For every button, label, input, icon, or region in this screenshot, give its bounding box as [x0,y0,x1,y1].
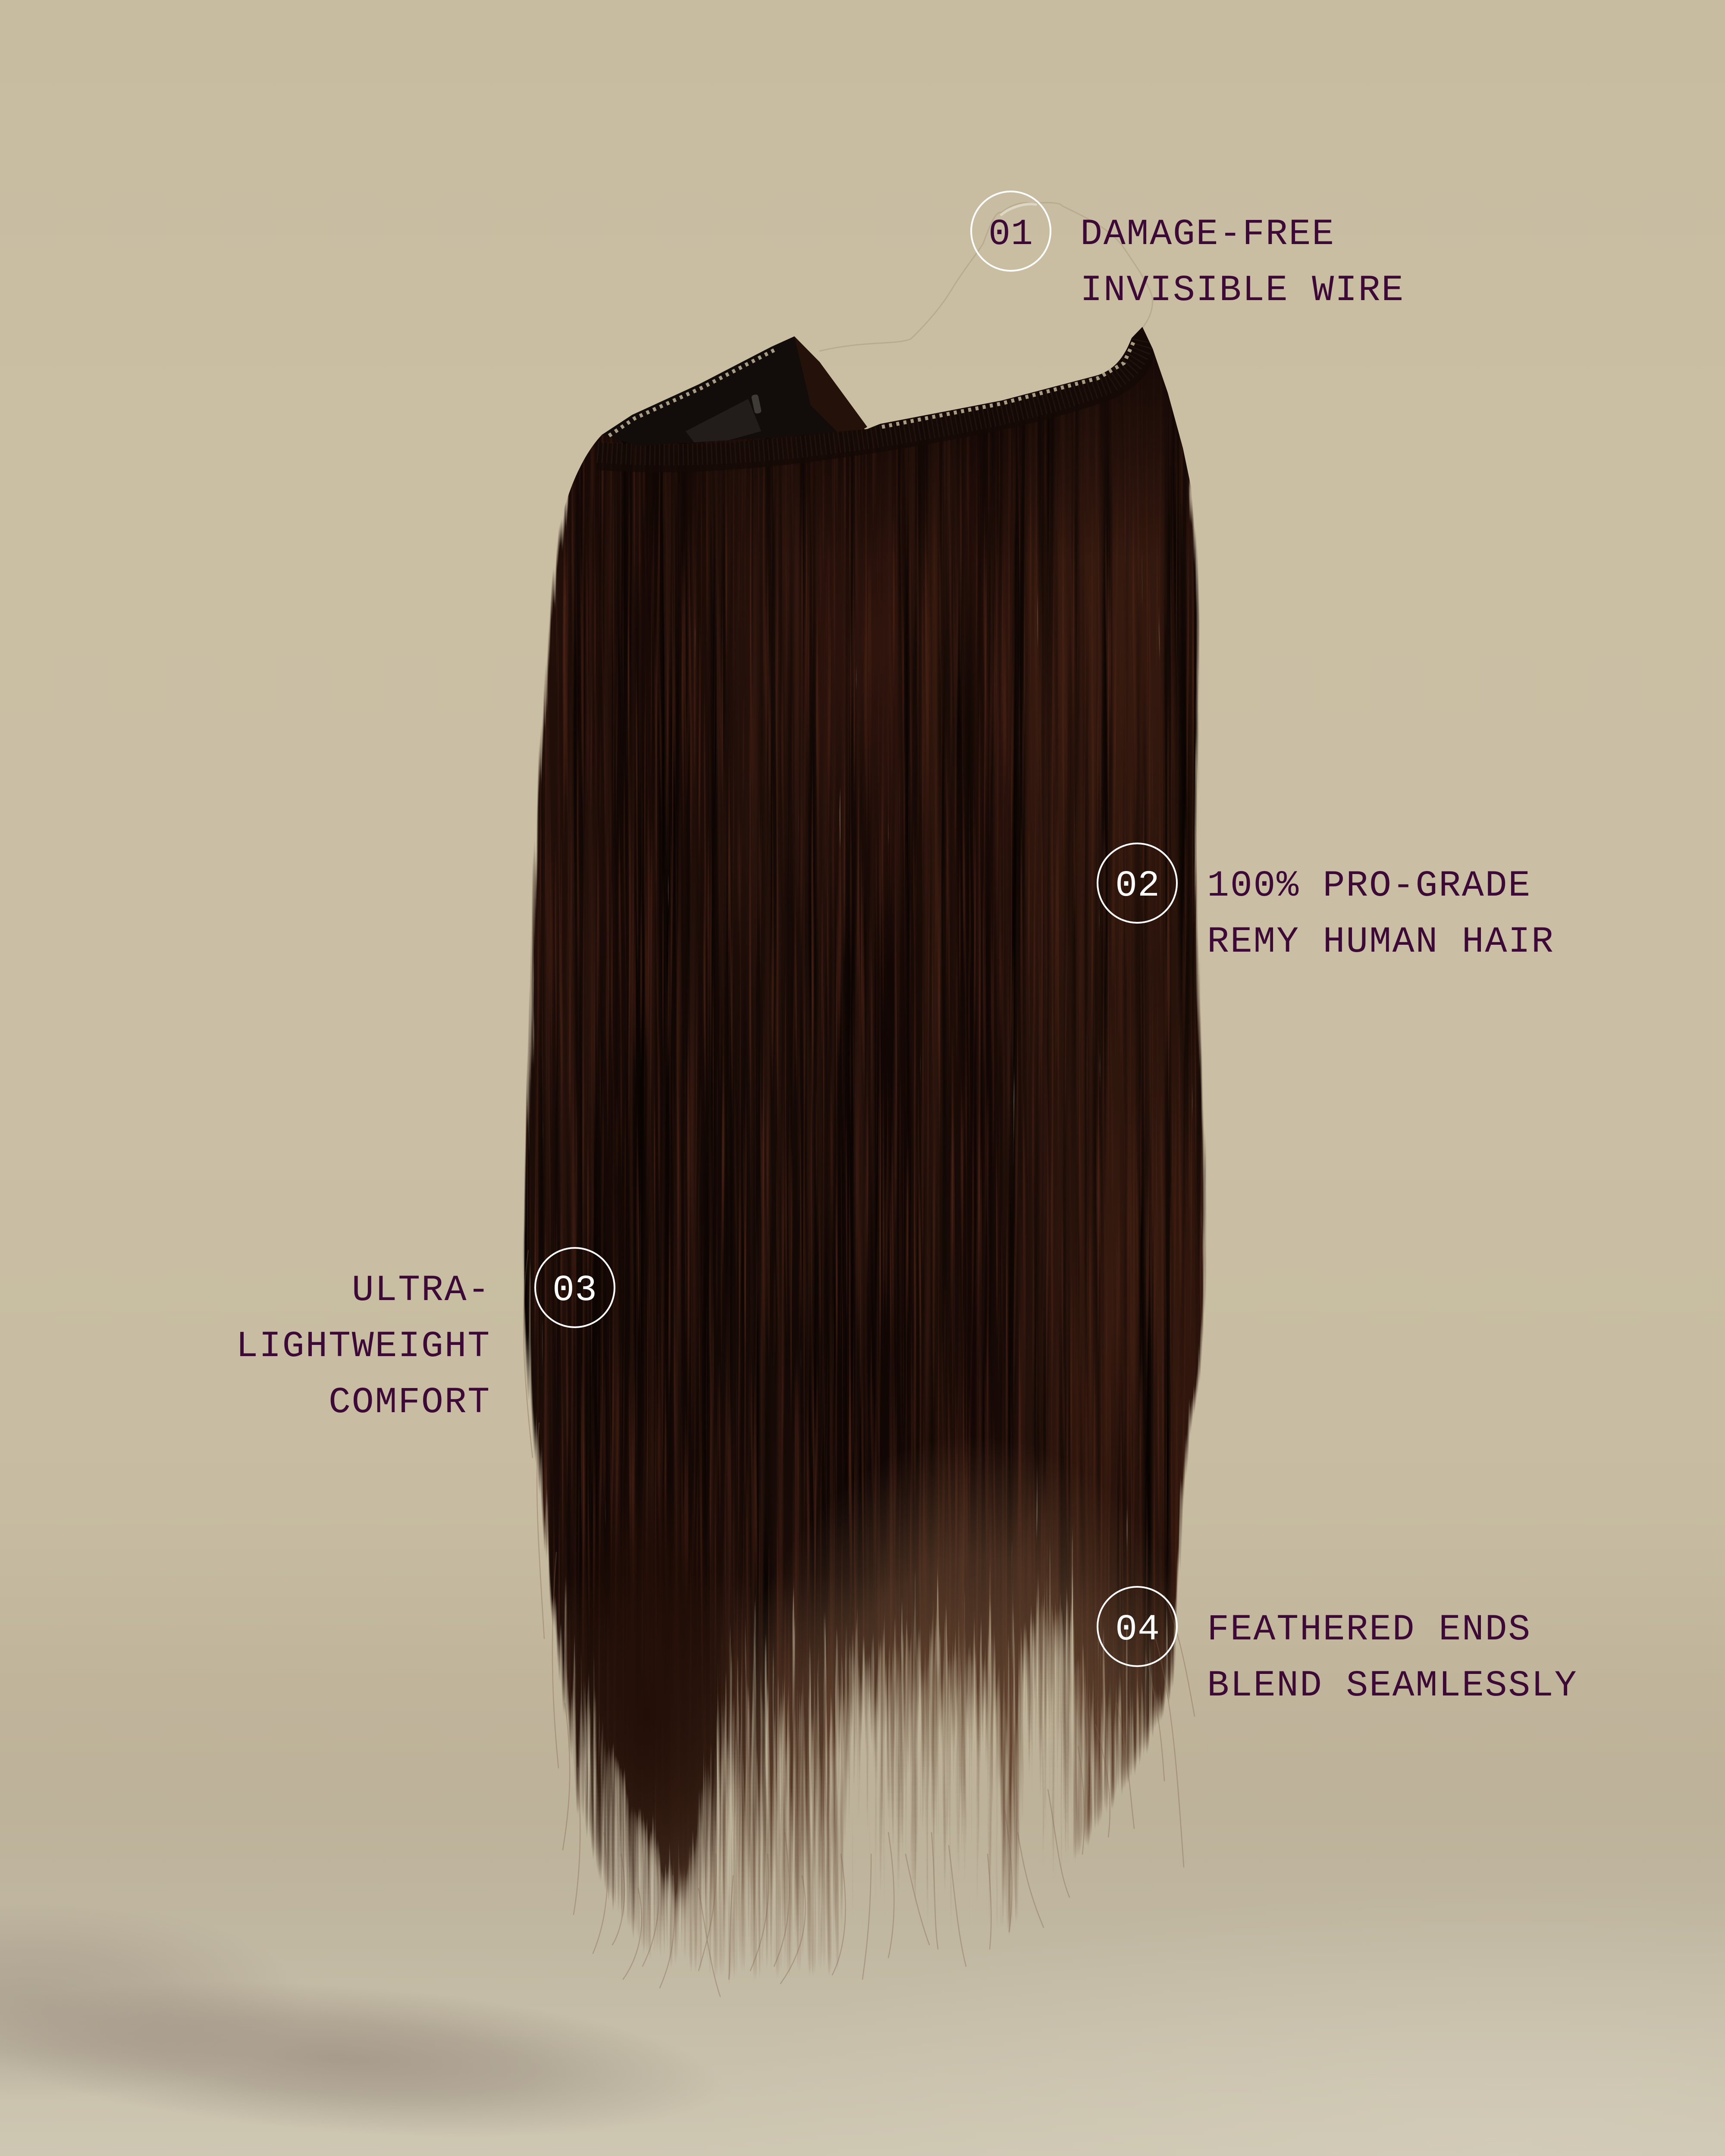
stray invisible wire strand [820,203,1153,351]
number badge 04 [1098,1587,1177,1666]
lace edge on front weft [882,341,1134,427]
callout 03: ultra-lightweight comfort [236,1248,615,1423]
woven weft band [597,332,1144,458]
number badge 01 [971,191,1051,271]
number badge 02: 02 [1115,865,1160,907]
label text 03: COMFORT [329,1382,491,1423]
label text 03: LIGHTWEIGHT [236,1326,491,1367]
label text 01: DAMAGE-FREE [1080,213,1335,255]
label text 04: FEATHERED ENDS [1207,1609,1531,1651]
label text 02: 100% PRO-GRADE [1207,865,1531,907]
flyaway feathered strands [524,1250,1195,1996]
label text 02: REMY HUMAN HAIR [1207,921,1555,963]
hair back flap with clip [590,336,867,461]
number badge 03: 03 [552,1269,597,1311]
label text 04: BLEND SEAMLESSLY [1207,1665,1578,1707]
label text 03: ULTRA- [352,1269,491,1311]
hair extension weft body [523,327,1207,1981]
label text 01: INVISIBLE WIRE [1080,270,1405,311]
callout 02: remy human hair [1098,843,1555,963]
floor shadow [0,1902,729,2156]
number badge 01: 01 [988,213,1033,255]
lace edge on flap [608,350,774,436]
number badge 04: 04 [1115,1609,1160,1651]
callout 01: damage-free invisible wire [971,191,1405,311]
snap clip [686,394,762,448]
callout 04: feathered ends [1098,1587,1578,1707]
number badge 03 [535,1248,615,1327]
number badge 02 [1098,843,1177,923]
